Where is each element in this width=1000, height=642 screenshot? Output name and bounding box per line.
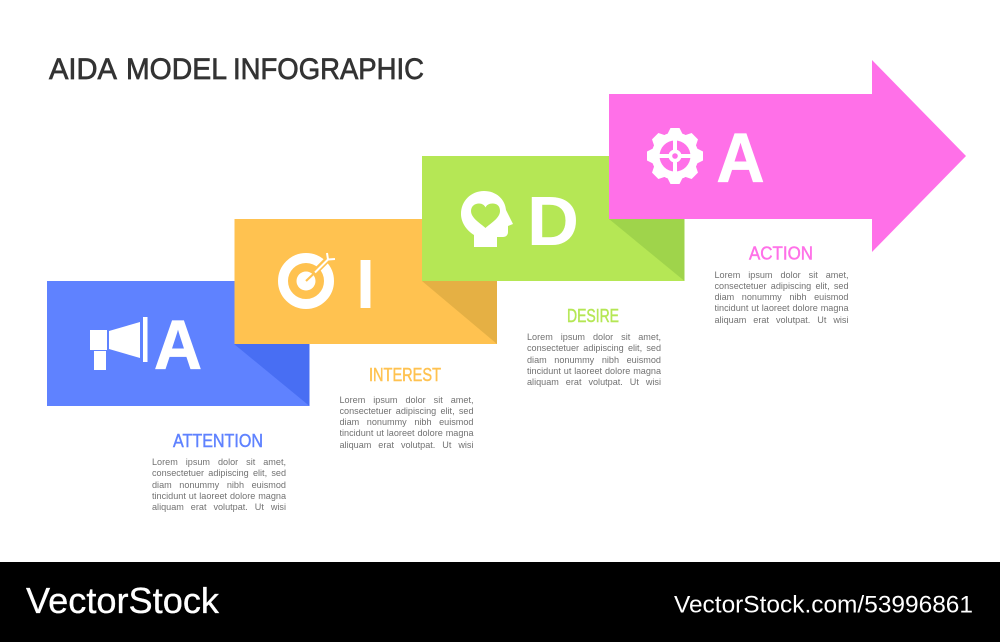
body text: desire: tincidunt ut laoreet dolore magna [527, 366, 661, 376]
body text: attention: consectetuer adipiscing elit, sed [152, 468, 286, 478]
text block: action [714, 244, 848, 327]
body text: interest: consectetuer adipiscing elit, sed [340, 406, 474, 416]
body text: action: aliquam erat volutpat. Ut wisi [714, 315, 848, 325]
footer logo text: VectorStock [26, 580, 220, 621]
body text: interest: aliquam erat volutpat. Ut wisi [340, 440, 474, 450]
body text: interest: Lorem ipsum dolor sit amet, [340, 395, 474, 405]
letter A: A [154, 306, 202, 384]
footer image id: VectorStock.com/53996861 [674, 592, 973, 618]
panel: action arrow [609, 60, 966, 252]
body text: desire: diam nonummy nibh euismod [527, 355, 661, 365]
panel: interest step [234, 219, 497, 344]
body text: attention: diam nonummy nibh euismod [152, 480, 286, 490]
body text: interest [340, 395, 474, 452]
footer bar [0, 562, 1000, 642]
body text: interest: tincidunt ut laoreet dolore magna [340, 428, 474, 438]
text block: desire [527, 306, 661, 389]
body text: attention: tincidunt ut laoreet dolore magna [152, 491, 286, 501]
body text: attention: Lorem ipsum dolor sit amet, [152, 457, 286, 467]
body text: action: tincidunt ut laoreet dolore magna [714, 303, 848, 313]
body text: desire: consectetuer adipiscing elit, sed [527, 343, 661, 353]
heading: desire: DESIRE [567, 306, 619, 326]
letter A: A [716, 119, 764, 197]
heading: action: ACTION [749, 244, 813, 264]
body text: action: consectetuer adipiscing elit, sed [714, 281, 848, 291]
text block: attention [152, 431, 286, 514]
body text: desire: Lorem ipsum dolor sit amet, [527, 332, 661, 342]
heading: interest: INTEREST [369, 365, 441, 385]
body text: interest: diam nonummy nibh euismod [340, 417, 474, 427]
icon: gear [647, 128, 703, 184]
title: MODEL [126, 53, 227, 86]
icon: megaphone [90, 317, 148, 370]
heading: attention: ATTENTION [173, 431, 263, 451]
icon: head with heart [461, 191, 513, 247]
panel: desire step [422, 156, 684, 281]
body text: desire [527, 332, 661, 389]
title: INFOGRAPHIC [233, 53, 424, 86]
panel: attention step [47, 281, 310, 406]
body text: action [714, 270, 848, 327]
text block: interest [340, 365, 474, 452]
letter D: D [527, 182, 579, 260]
title: AIDA [49, 53, 117, 86]
body text: action: diam nonummy nibh euismod [714, 292, 848, 302]
letter I: I [356, 245, 375, 323]
title [49, 53, 424, 86]
body text: desire: aliquam erat volutpat. Ut wisi [527, 377, 661, 387]
icon: target with dart [283, 253, 335, 304]
body text: attention: aliquam erat volutpat. Ut wisi [152, 502, 286, 512]
body text: attention [152, 457, 286, 514]
body text: action: Lorem ipsum dolor sit amet, [714, 270, 848, 280]
